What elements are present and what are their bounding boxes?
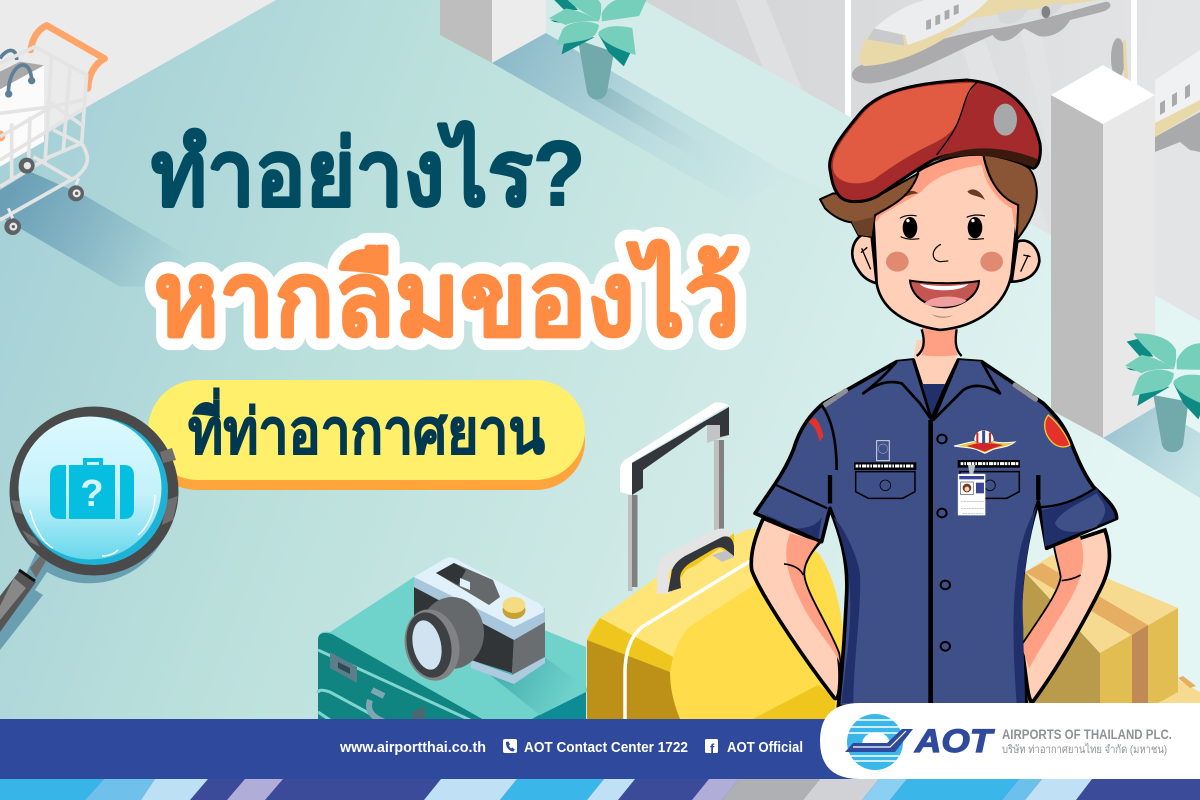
- left arm: [751, 518, 840, 699]
- AOT logo: [845, 712, 995, 772]
- right wall with window: [643, 0, 1200, 321]
- far airplane engine: [1111, 38, 1128, 78]
- wings badge: [954, 430, 1015, 453]
- footer website: www.airportthai.co.th: [339, 740, 486, 756]
- eyes: [900, 215, 985, 239]
- right arm: [1022, 530, 1109, 703]
- company name Thai: บริษัท ท่าอากาศยานไทย จำกัด (มหาชน): [1002, 743, 1167, 756]
- rim: [15, 412, 173, 570]
- carry handle: [657, 529, 734, 594]
- footer contact center: AOT Contact Center 1722: [524, 740, 688, 756]
- hair: [820, 155, 1037, 240]
- top-left grey wall: [0, 0, 276, 156]
- heading: line two: หากลืมของไว้: [154, 240, 740, 358]
- icon: facebook: f: [710, 741, 715, 756]
- face: [873, 155, 1018, 330]
- pill subtitle: [148, 380, 585, 490]
- heading: line one: ทำอย่างไร?: [151, 121, 585, 225]
- forehead shade: [874, 156, 1017, 233]
- sleeve folds: [776, 485, 1095, 508]
- logo arrow band: [845, 729, 913, 752]
- officer head: [820, 80, 1040, 356]
- pillar floor shadow: [1103, 407, 1200, 498]
- pill subtitle: ที่ท่าอากาศยาน: [188, 388, 545, 467]
- right shoulder patch: [1045, 415, 1070, 447]
- cardboard box: [1015, 555, 1200, 719]
- epaulettes: [825, 385, 1042, 405]
- upper light floor: [546, 0, 852, 200]
- suitcase clasps: [330, 652, 425, 725]
- cart handle: [31, 25, 105, 88]
- camera: [398, 557, 590, 715]
- yellow suitcase: [587, 402, 846, 719]
- green suitcases: [318, 577, 586, 730]
- logo panel: [820, 703, 1200, 779]
- glass shadow: [0, 416, 173, 650]
- shopping bag: [0, 50, 44, 167]
- cheeks: [886, 252, 1003, 272]
- neck: [914, 340, 957, 386]
- suitcase body: [587, 529, 846, 719]
- cart frame: [0, 47, 87, 220]
- telescopic handle: [620, 402, 729, 591]
- mouth: [910, 281, 979, 318]
- footer facebook name: AOT Official: [727, 740, 803, 756]
- shirt inner V: [922, 384, 945, 415]
- ears: [852, 235, 1039, 283]
- lower plant pot shadow: [590, 88, 730, 170]
- floor shadow band: [492, 33, 790, 205]
- right pocket and name tag: [958, 460, 1020, 498]
- far airplane at right: [1155, 50, 1200, 152]
- camera viewfinder: [436, 563, 500, 605]
- right plant: [1125, 333, 1200, 452]
- shirt side shading: [760, 488, 1115, 703]
- collar: [863, 360, 1000, 420]
- suitcase question icon: [50, 460, 134, 519]
- placket: [928, 420, 933, 703]
- white pillar: [1051, 65, 1155, 438]
- suitcase question icon: ?: [80, 473, 104, 515]
- icon: phone: [503, 739, 517, 753]
- logo letters: AOT: [914, 723, 995, 759]
- officer body: [751, 340, 1117, 707]
- neck top: [922, 327, 958, 356]
- brows: [902, 189, 985, 200]
- footer stripes: [0, 779, 1200, 800]
- ID card: [958, 465, 985, 515]
- handle: [0, 556, 46, 632]
- lens: [20, 417, 168, 565]
- airplane outside window: [852, 0, 1111, 83]
- footer bar: [0, 719, 1200, 779]
- cart floor shadow: [0, 172, 240, 287]
- left shoulder patch: [808, 417, 823, 442]
- nose: [933, 244, 948, 262]
- grey pillar left: [440, 0, 546, 63]
- shopping cart: [0, 25, 240, 287]
- camera lens: [398, 597, 484, 686]
- left pocket and name tag: [854, 441, 916, 498]
- heading: line two: หากลืมของไว้: [154, 240, 740, 358]
- beret: [830, 80, 1040, 202]
- logo globe: [847, 714, 903, 770]
- camera shutter button: [502, 597, 526, 619]
- icon: facebook: [705, 739, 718, 756]
- magnifying glass: [0, 412, 178, 650]
- plant top: [549, 0, 653, 100]
- company name English: AIRPORTS OF THAILAND PLC.: [1002, 727, 1172, 742]
- shirt: [755, 360, 1117, 707]
- officer character: [751, 80, 1117, 707]
- cart wheels: [4, 158, 84, 235]
- shirt buttons: [937, 435, 950, 651]
